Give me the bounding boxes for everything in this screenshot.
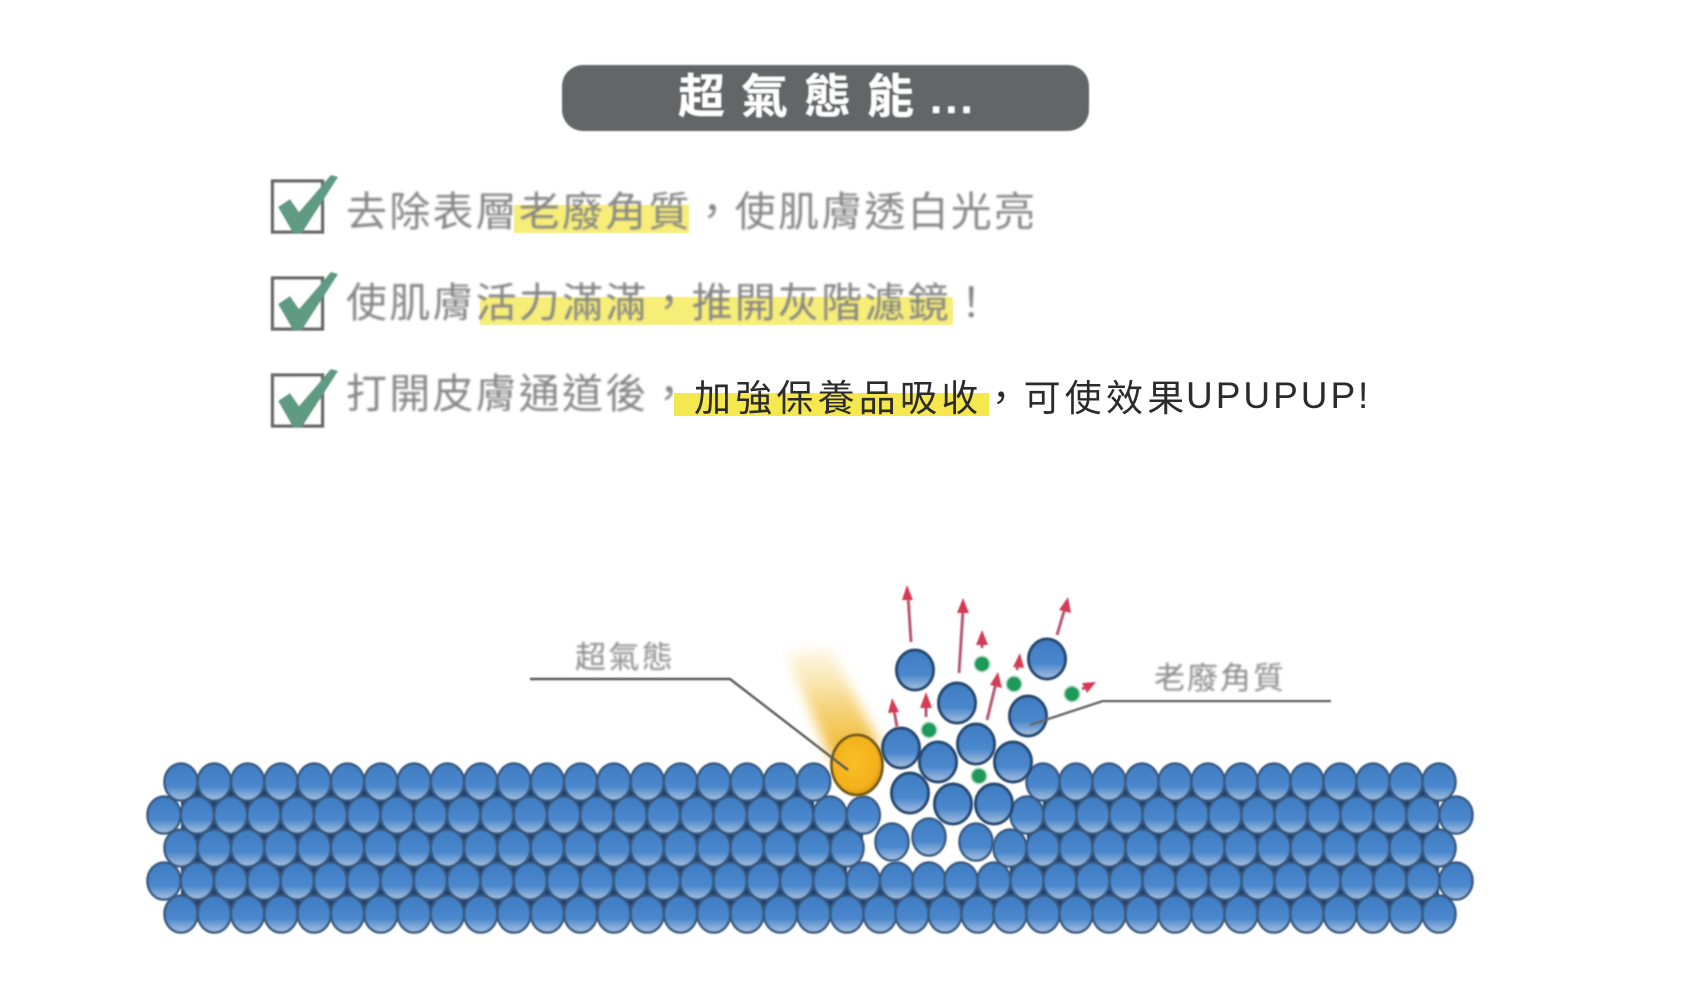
red arrows xyxy=(888,585,1096,727)
heading text: ... xyxy=(930,74,976,123)
heading text: 超氣態能 xyxy=(678,70,930,123)
checklist item 3 xyxy=(272,369,1371,427)
checklist text 3 grey part: 打開皮膚通道後， xyxy=(346,371,692,417)
checklist text 3 UPUPUP: ! xyxy=(1358,375,1371,416)
green particles xyxy=(921,656,1080,784)
label: 老廢角質: 老廢角質 xyxy=(1154,661,1286,696)
glow trail of supercritical agent xyxy=(786,648,880,760)
checklist item 2 xyxy=(272,272,994,330)
checklist item 1 xyxy=(272,175,1037,235)
checklist text 3 UPUPUP: UPUPUP xyxy=(1186,375,1358,416)
checklist text 1: 去除表層老廢角質，使肌膚透白光亮 xyxy=(346,189,1037,235)
detached dead skin cells xyxy=(875,639,1066,861)
icon: checkbox 3 xyxy=(272,369,338,427)
gold supercritical ball xyxy=(832,735,882,795)
leader line: 超氣態 xyxy=(530,679,848,770)
skin layer of cells xyxy=(147,763,1473,933)
leader line: 老廢角質 xyxy=(1030,701,1331,725)
checklist text 3 dark part: 加強保養品吸收，可使效果 xyxy=(694,378,1188,419)
icon: checkbox 1 xyxy=(272,175,338,233)
checklist text 2: 使肌膚活力滿滿，推開灰階濾鏡！ xyxy=(346,280,994,326)
faint ghost line under checklist xyxy=(345,422,1430,426)
heading pill xyxy=(562,65,1089,131)
icon: checkbox 2 xyxy=(272,272,338,330)
label: 超氣態: 超氣態 xyxy=(575,640,675,675)
